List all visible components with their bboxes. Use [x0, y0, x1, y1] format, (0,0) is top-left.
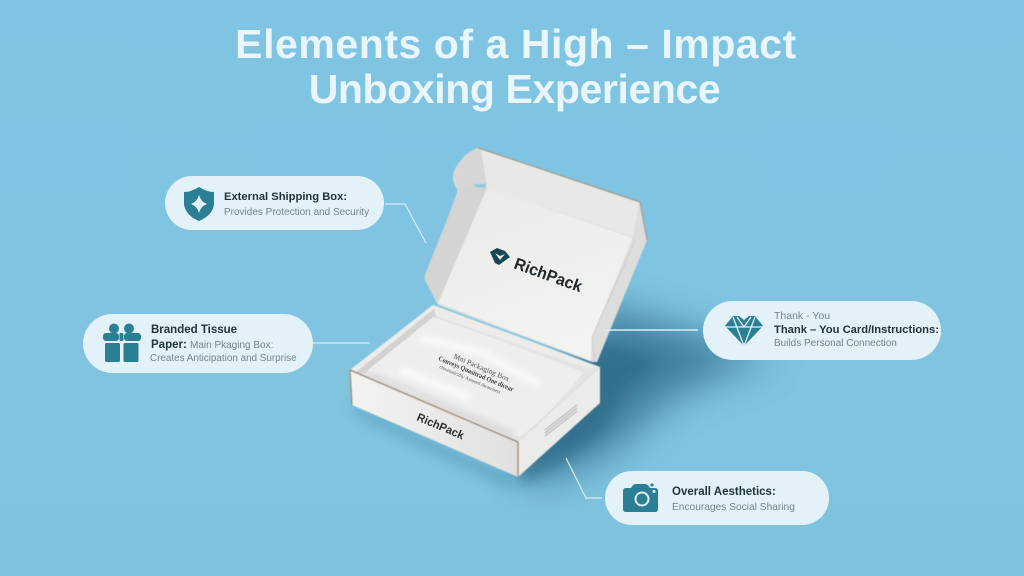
label: thank-you card: Thank – You Card/Instructions: [774, 324, 939, 336]
icon: diamond heart [725, 316, 763, 345]
label: overall aesthetics: Overall Aesthetics: [672, 486, 776, 498]
icon: camera [623, 483, 658, 512]
left wall [350, 305, 436, 374]
description: encourages sharing: Encourages Social Sharing [672, 502, 795, 513]
front face [350, 370, 518, 477]
title: Unboxing Experience [309, 66, 720, 112]
icon: shield [184, 187, 214, 221]
label: paper with overlapping subtitle: Paper: Main Pkaging Box: [151, 339, 273, 351]
leader line: thank-you card [603, 329, 698, 331]
title [235, 21, 797, 112]
panel: branded tissue paper [83, 314, 313, 373]
leader line: shipping box [385, 204, 426, 243]
open lid [425, 148, 647, 362]
description: provides protection: Provides Protection and Security [224, 207, 369, 218]
back wall [433, 305, 600, 368]
box cast shadow [350, 305, 775, 486]
label: thank-you small: Thank - You [774, 310, 830, 322]
lid logo [490, 248, 585, 296]
label: external shipping box: External Shipping Box: [224, 191, 347, 203]
right face [518, 367, 600, 477]
description: creates anticipation: Creates Anticipation and Surprise [150, 353, 297, 364]
panel: overall aesthetics [605, 471, 829, 525]
panel: external shipping box [165, 176, 384, 230]
front logo: RichPack [415, 412, 466, 443]
tissue paper printed text: Conveys Quasitrad One dicear [437, 354, 515, 393]
leader line: tissue paper [313, 342, 370, 344]
right flap [591, 203, 647, 362]
label: branded tissue: Branded Tissue [151, 324, 237, 336]
box base [350, 305, 600, 477]
inner lid panel [438, 188, 633, 361]
tissue paper printed text: chromatically Assured Awareness [438, 365, 501, 396]
left corner tab [455, 148, 487, 190]
description: builds connection: Builds Personal Connection [774, 338, 897, 349]
title: Elements of a High – Impact [235, 21, 797, 67]
leader line: aesthetics [566, 458, 602, 498]
tissue paper printed text: Mni Packaging Box [452, 352, 511, 383]
icon: gift [103, 324, 141, 362]
left flap [425, 185, 487, 303]
tissue paper [368, 317, 583, 437]
lid logo: RichPack [512, 255, 585, 296]
panel: thank-you card [703, 301, 941, 360]
lid top flap [481, 149, 639, 237]
